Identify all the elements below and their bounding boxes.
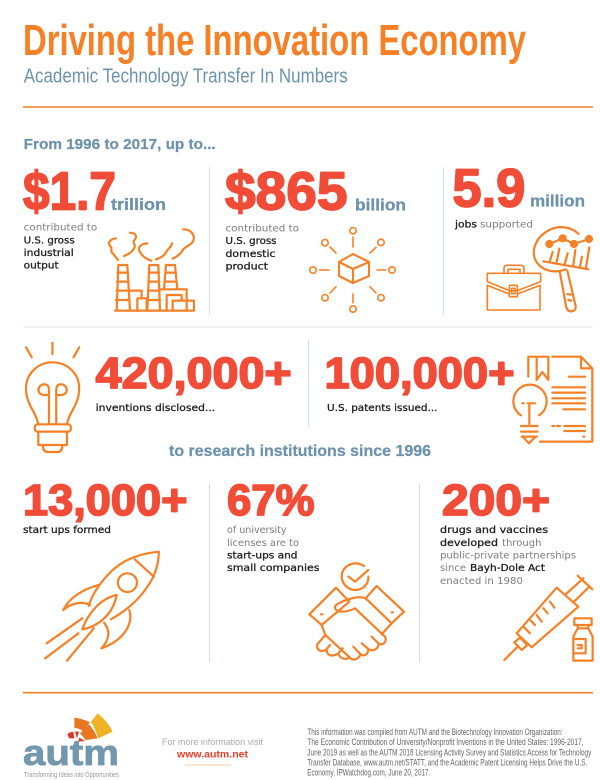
icon: magnifier with chart: [534, 227, 592, 311]
icon: cube network: [310, 228, 395, 312]
text: licenses to start-ups: [227, 525, 320, 574]
text: jobs supported: supported: [480, 220, 533, 231]
text: drugs and vaccines: public-private partnerships: [440, 551, 576, 562]
text: contributed to GDP: [226, 224, 299, 272]
text: drugs and vaccines: [440, 525, 576, 587]
stat: 67%: 67%: [227, 476, 314, 525]
stat: 13,000+: 13,000+: [23, 476, 188, 525]
text: jobs supported: [454, 220, 533, 231]
text: contributed to GDP: product: [226, 262, 268, 272]
panel: start ups: [23, 476, 188, 661]
panel: industrial output: [23, 162, 194, 311]
stat: $1.7 trillion: $1.7: [23, 162, 116, 222]
section heading: period: From 1996 to 2017, up to...: [24, 137, 216, 153]
text: sources: [307, 727, 591, 778]
logo mark: [67, 713, 113, 742]
icon: factory: [109, 229, 194, 311]
stat: $865 billion: $865: [225, 162, 348, 222]
subtitle: Academic Technology Transfer In Numbers: [24, 66, 348, 88]
text: patents issued: U.S. patents issued...: [327, 403, 438, 414]
icon: briefcase: [487, 265, 541, 310]
more information: [162, 737, 263, 765]
text: licenses to start-ups: small companies: [227, 563, 320, 574]
stat: $865 billion: [225, 162, 406, 222]
icon: patent document with bulb: [513, 357, 592, 443]
text: licenses to start-ups: start-ups and: [227, 551, 298, 562]
text: contributed to GDP: U.S. gross: [226, 236, 276, 247]
panel: gross domestic product: [225, 162, 406, 312]
text: inventions disclosed: inventions disclosed...: [96, 403, 215, 414]
more information: www.autm.net: [176, 750, 249, 761]
text: drugs and vaccines: drugs and vaccines: [440, 525, 548, 536]
icon: handshake: [309, 563, 404, 660]
logo: autm: [23, 713, 119, 779]
logo tagline: Transforming Ideas into Opportunities: [24, 772, 119, 779]
text: drugs and vaccines: Bayh-Dole Act: [470, 563, 545, 574]
text: drugs and vaccines: developed: [440, 538, 498, 549]
stat: 100,000+: 100,000+: [324, 349, 514, 398]
text: drugs and vaccines: since: [440, 563, 466, 574]
text: drugs and vaccines: through: [502, 538, 542, 549]
icon: syringe and vial: [504, 576, 593, 661]
text: licenses to start-ups: licenses are to: [227, 538, 299, 549]
text: start ups formed: start ups formed: [23, 525, 111, 536]
section heading: research institutions: to research institutions since 1996: [169, 443, 431, 460]
panel: jobs: [452, 159, 592, 311]
text: drugs and vaccines: enacted in 1980: [440, 576, 523, 587]
text: contributed to industrial output: [24, 223, 97, 272]
text: contributed to industrial output: output: [24, 261, 59, 272]
stat: 200+: 200+: [442, 476, 550, 525]
panel: drugs and vaccines: [440, 476, 593, 661]
panel: patents issued: [324, 349, 592, 443]
text: contributed to industrial output: U.S. gross: [24, 235, 75, 246]
text: contributed to GDP: domestic: [226, 249, 276, 260]
stat: 5.9 million: million: [530, 192, 585, 211]
stat: $1.7 trillion: trillion: [111, 195, 166, 214]
more information: For more information visit: [162, 737, 263, 748]
text: jobs supported: jobs: [454, 220, 477, 231]
stat: 5.9 million: [452, 159, 585, 219]
text: contributed to GDP: contributed to: [226, 224, 299, 234]
stat: $865 billion: billion: [355, 196, 406, 215]
panel: inventions disclosed: [26, 343, 292, 452]
text: contributed to industrial output: contributed to: [24, 223, 97, 234]
icon: light bulb: [26, 343, 79, 452]
logo wordmark: autm: [23, 732, 119, 773]
stat: 5.9 million: 5.9: [452, 159, 525, 219]
text: licenses to start-ups: of university: [227, 525, 287, 536]
panel: university licenses: [227, 476, 404, 660]
icon: rocket: [45, 552, 159, 661]
text: contributed to industrial output: industrial: [24, 248, 74, 259]
stat: 420,000+: 420,000+: [96, 349, 292, 398]
text: sources: Economy, IPWatchdog.com, June 20, 2017.: [307, 768, 430, 778]
